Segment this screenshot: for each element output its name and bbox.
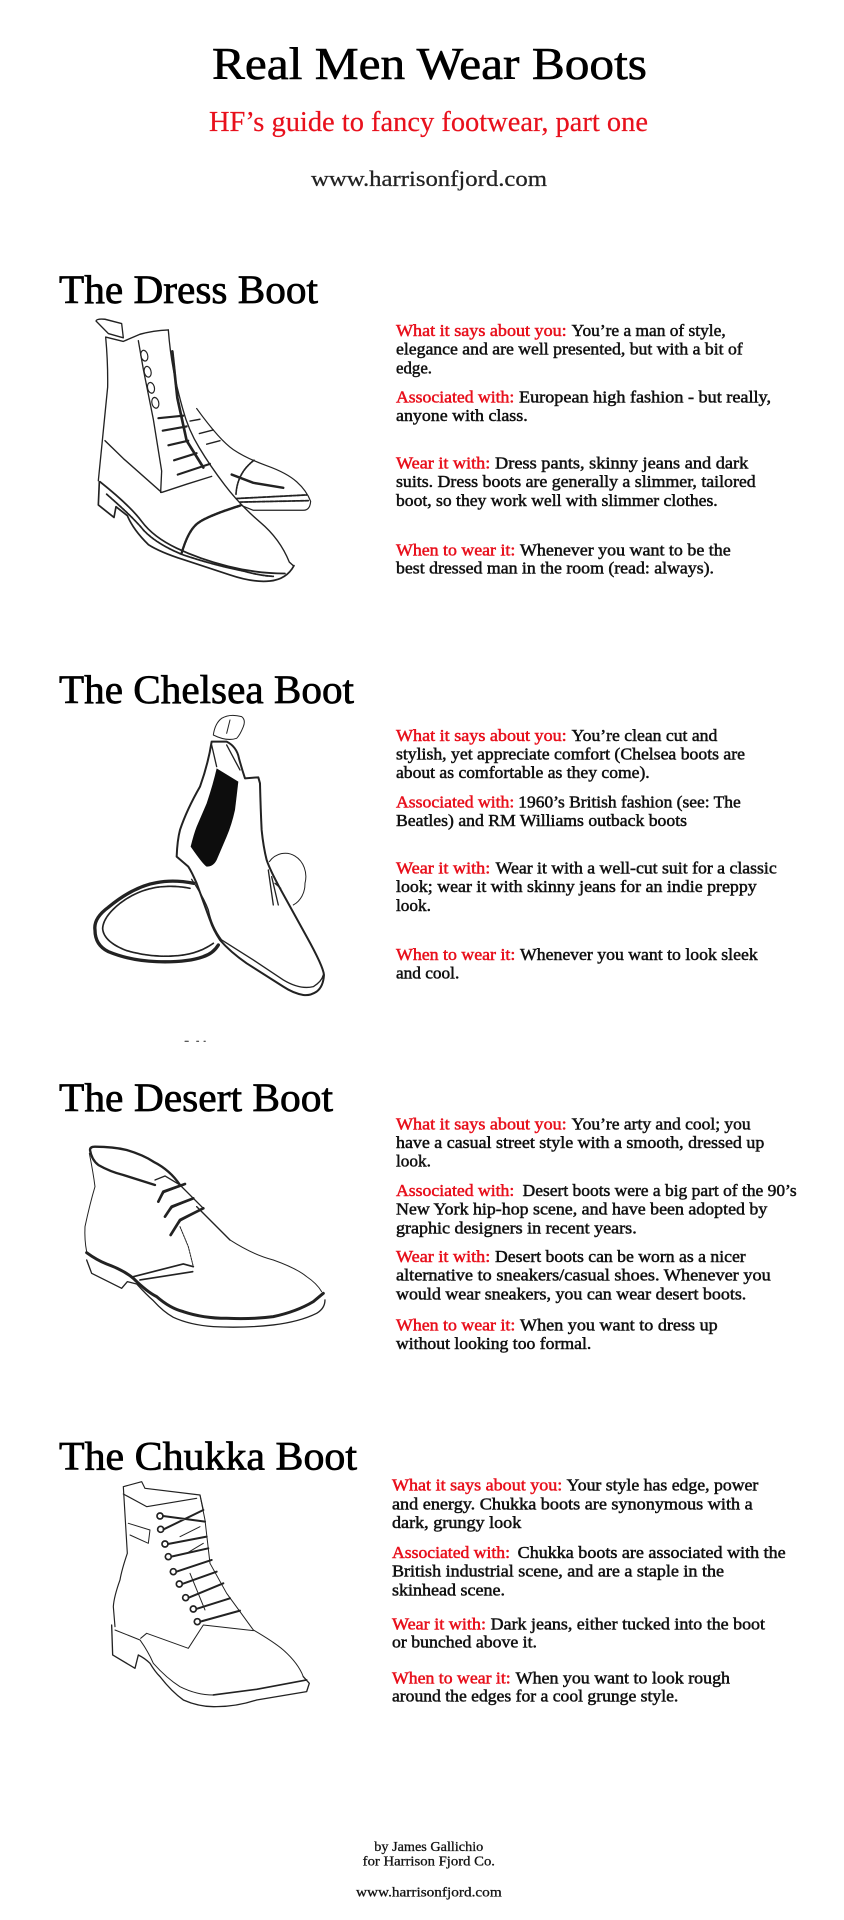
panel: desert boot [59, 1075, 797, 1353]
heading: the desert boot: The Desert Boot [59, 1075, 333, 1120]
text block: chukka boot details: and energy. Chukka boots are synonymous with a [392, 1494, 753, 1513]
text block: desert boot details [396, 1114, 797, 1353]
text block: chukka boot details: Wear it with: [392, 1614, 486, 1633]
text block: chelsea boot details: stylish, yet appreciate comfort (Chelsea boots are [396, 744, 745, 764]
text block: chelsea boot details: 1960’s British fashion (see: The [518, 792, 741, 812]
text block: dress boot details: Whenever you want to be the [520, 540, 731, 560]
text block: chukka boot details: Associated with: [392, 1543, 510, 1562]
text block: chelsea boot details [396, 726, 777, 982]
text block: dress boot details: anyone with class. [396, 406, 528, 425]
text block: dress boot details: European high fashion - but really, [519, 388, 771, 406]
text block: chelsea boot details: about as comfortable as they come). [396, 763, 650, 782]
illustration: dress boot [96, 319, 311, 581]
heading: the chukka boot: The Chukka Boot [59, 1433, 357, 1478]
text block: desert boot details: would wear sneakers, you can wear desert boots. [396, 1284, 746, 1303]
text block: desert boot details: Desert boots were a big part of the 90’s [523, 1181, 797, 1200]
text block: dress boot details: suits. Dress boots are generally a slimmer, tailored [396, 472, 756, 491]
text block: dress boot details: Dress pants, skinny jeans and dark [495, 454, 749, 472]
text block: desert boot details: Desert boots can be worn as a nicer [495, 1247, 746, 1266]
text block: chukka boot details: or bunched above it. [392, 1633, 537, 1652]
panel: chelsea boot [59, 667, 777, 1041]
title: Real Men Wear Boots [212, 38, 647, 89]
text block: dress boot details [396, 321, 771, 578]
text block: chukka boot details: What it says about you: [392, 1476, 562, 1495]
text block: chukka boot details: dark, grungy look [392, 1513, 522, 1532]
heading: the dress boot: The Dress Boot [59, 267, 318, 312]
text block: chukka boot details: Your style has edge, power [567, 1476, 759, 1495]
text block: chukka boot details: around the edges for a cool grunge style. [392, 1687, 678, 1706]
text block: chukka boot details: Chukka boots are associated with the [518, 1543, 786, 1562]
text block: dress boot details: best dressed man in the room (read: always). [396, 558, 714, 578]
text block: chukka boot details [392, 1476, 786, 1706]
text block: desert boot details: look. [396, 1152, 431, 1171]
footer credits: for Harrison Fjord Co. [363, 1855, 495, 1870]
text block: chelsea boot details: What it says about you: [396, 726, 567, 745]
text block: dress boot details: Associated with: [396, 388, 514, 406]
text block: chukka boot details: British industrial scene, and are a staple in the [392, 1562, 724, 1581]
illustration: desert boot [85, 1147, 325, 1327]
text block: chelsea boot details: You’re clean cut and [572, 726, 718, 745]
text block: dress boot details: What it says about you: [396, 321, 567, 340]
text block: chelsea boot details: look; wear it with skinny jeans for an indie preppy [396, 877, 757, 896]
text block: desert boot details: What it says about you: [396, 1114, 567, 1134]
text block: dress boot details: You’re a man of style, [572, 321, 726, 340]
text block: desert boot details: You’re arty and cool; you [572, 1114, 751, 1134]
text block: chukka boot details: skinhead scene. [392, 1580, 505, 1599]
text block: desert boot details: When to wear it: [396, 1315, 515, 1334]
text block: chelsea boot details: and cool. [396, 964, 459, 982]
panel: chukka boot [59, 1433, 786, 1707]
text block: chukka boot details: When you want to look rough [516, 1668, 731, 1687]
text block: desert boot details: graphic designers in recent years. [396, 1218, 637, 1237]
illustration: chukka boot [112, 1482, 309, 1707]
heading: the chelsea boot: The Chelsea Boot [59, 667, 354, 712]
text block: dress boot details: elegance and are well presented, but with a bit of [396, 340, 743, 358]
text block: desert boot details: When you want to dress up [520, 1315, 718, 1334]
footer credits: by James Gallichio [374, 1840, 483, 1855]
subtitle: HF’s guide to fancy footwear, part one [209, 107, 648, 138]
text block: dress boot details: boot, so they work well with slimmer clothes. [396, 491, 718, 510]
text block: desert boot details: Wear it with: [396, 1247, 490, 1266]
text block: dress boot details: Wear it with: [396, 454, 490, 472]
footer credits: www.harrisonfjord.com [356, 1886, 502, 1901]
text block: dress boot details: edge. [396, 358, 432, 378]
text block: chelsea boot details: look. [396, 896, 431, 915]
website url: www.harrisonfjord.com [311, 166, 548, 191]
text block: chelsea boot details: Wear it with: [396, 858, 490, 878]
text block: dress boot details: When to wear it: [396, 540, 515, 560]
footer credits [356, 1840, 502, 1901]
text block: desert boot details: New York hip-hop scene, and have been adopted by [396, 1200, 768, 1219]
text block: desert boot details: alternative to sneakers/casual shoes. Whenever you [396, 1266, 771, 1284]
text block: chelsea boot details: Associated with: [396, 792, 514, 812]
text block: chelsea boot details: Wear it with a well-cut suit for a classic [496, 858, 777, 878]
text block: chelsea boot details: Beatles) and RM Williams outback boots [396, 811, 687, 830]
text block: desert boot details: Associated with: [396, 1181, 514, 1200]
text block: desert boot details: without looking too formal. [396, 1334, 591, 1353]
text block: chelsea boot details: When to wear it: [396, 945, 515, 964]
text block: chelsea boot details: Whenever you want to look sleek [520, 945, 758, 964]
text block: chukka boot details: When to wear it: [392, 1668, 511, 1687]
panel: dress boot [59, 267, 771, 581]
text block: chukka boot details: Dark jeans, either tucked into the boot [491, 1614, 765, 1633]
text block: desert boot details: have a casual street style with a smooth, dressed up [396, 1133, 764, 1152]
illustration: chelsea boot [95, 715, 324, 1041]
